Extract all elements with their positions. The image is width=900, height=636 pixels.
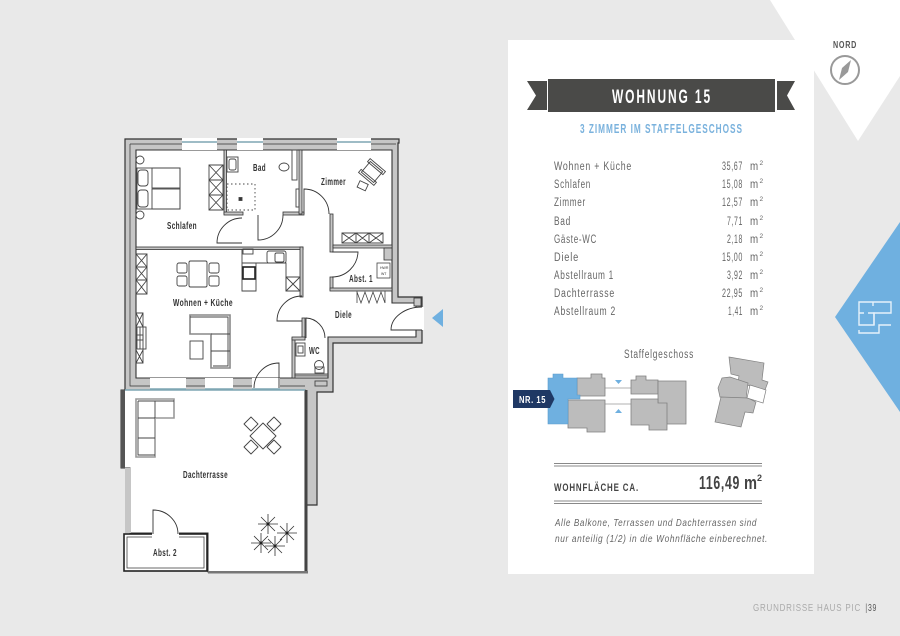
doors: [217, 189, 422, 388]
area table: Abstellraum 1: [554, 270, 614, 282]
area table: 22,95: [722, 288, 743, 300]
furniture: room: [342, 159, 385, 243]
area table: m: [750, 288, 759, 300]
area table: 2,18: [727, 234, 743, 246]
furniture: bathroom: [227, 150, 299, 210]
page footer: |: [865, 603, 869, 614]
page footer: 39: [868, 603, 877, 614]
footnote: [554, 517, 768, 545]
storage appliance: [357, 263, 390, 303]
area table: 2: [760, 305, 764, 312]
area table: [554, 160, 764, 318]
room labels: Abst. 1: [349, 274, 373, 285]
room labels: Abst. 2: [153, 548, 177, 559]
area table: m: [750, 216, 759, 228]
total living area: 116,49: [699, 473, 740, 493]
area table: 12,57: [722, 197, 743, 209]
furniture: bedroom: [136, 156, 223, 219]
area table: Dachterrasse: [554, 288, 615, 300]
area table: m: [750, 179, 759, 191]
north badge: [770, 0, 900, 141]
storage room 2: [124, 510, 207, 571]
area table: Zimmer: [554, 197, 586, 209]
subtitle: 3 ZIMMER IM STAFFELGESCHOSS: [580, 122, 743, 136]
area table: m: [750, 252, 759, 264]
area table: Schlafen: [554, 179, 591, 191]
area table: 15,00: [722, 252, 743, 264]
total living area: m: [744, 473, 757, 493]
title banner: WOHNUNG 15: [612, 87, 712, 108]
total living area: WOHNFLÄCHE CA.: [554, 481, 639, 494]
room labels: Wohnen + Küche: [173, 298, 233, 309]
site map: [715, 357, 768, 427]
furniture: guest toilet: [296, 343, 327, 386]
direction markers: [615, 380, 622, 413]
page footer: GRUNDRISSE HAUS PIC: [753, 603, 861, 614]
area table: 1,41: [728, 306, 743, 318]
room labels: Bad: [253, 163, 266, 174]
terrace: [121, 390, 308, 574]
area table: 2: [760, 160, 764, 167]
entrance arrow: [432, 309, 443, 327]
footnote: nur anteilig (1/2) in die Wohnfläche einberechnet.: [555, 533, 768, 545]
area table: 2: [760, 251, 764, 258]
storage appliance: WT: [381, 272, 387, 276]
interior walls: [136, 150, 421, 378]
area table: 2: [760, 196, 764, 203]
area table: 3,92: [727, 270, 743, 282]
area table: Diele: [554, 252, 579, 264]
area table: m: [750, 234, 759, 246]
area table: m: [750, 270, 759, 282]
area table: 2: [760, 269, 764, 276]
area table: 7,71: [727, 216, 743, 228]
area table: m: [750, 197, 759, 209]
highlighted unit: [548, 374, 580, 424]
storage appliance: HWR: [380, 266, 389, 270]
room labels: Dachterrasse: [183, 470, 228, 481]
area table: 2: [760, 233, 764, 240]
area table: m: [750, 306, 759, 318]
room labels: Zimmer: [321, 177, 346, 188]
room labels: Diele: [335, 310, 352, 321]
north badge: NORD: [833, 40, 857, 51]
side tab: floor plan: [835, 222, 900, 412]
unit tag: NR. 15: [519, 394, 546, 406]
room labels: WC: [309, 346, 320, 357]
area table: Wohnen + Küche: [554, 161, 632, 173]
plants: [251, 514, 297, 556]
room labels: Schlafen: [167, 221, 197, 232]
title banner: [527, 79, 795, 112]
area table: Gäste-WC: [554, 234, 597, 246]
area table: m: [750, 161, 759, 173]
area table: 35,67: [722, 161, 743, 173]
area table: 2: [760, 178, 764, 185]
panel: apartment details card: [508, 40, 814, 574]
area table: 2: [760, 287, 764, 294]
floor plan: [121, 138, 424, 574]
area table: 15,08: [722, 179, 743, 191]
total living area: [554, 464, 762, 504]
furniture: living and kitchen: [136, 249, 300, 368]
total living area: 2: [757, 473, 762, 483]
room labels: [153, 163, 373, 559]
apartment walls: [125, 138, 424, 505]
footnote: Alle Balkone, Terrassen und Dachterrassen sind: [554, 517, 757, 529]
area table: Bad: [554, 216, 571, 228]
area table: 2: [760, 215, 764, 222]
building site diagram: [548, 374, 686, 432]
floor heading: Staffelgeschoss: [624, 349, 694, 361]
area table: Abstellraum 2: [554, 306, 616, 318]
unit tag: [513, 390, 554, 408]
